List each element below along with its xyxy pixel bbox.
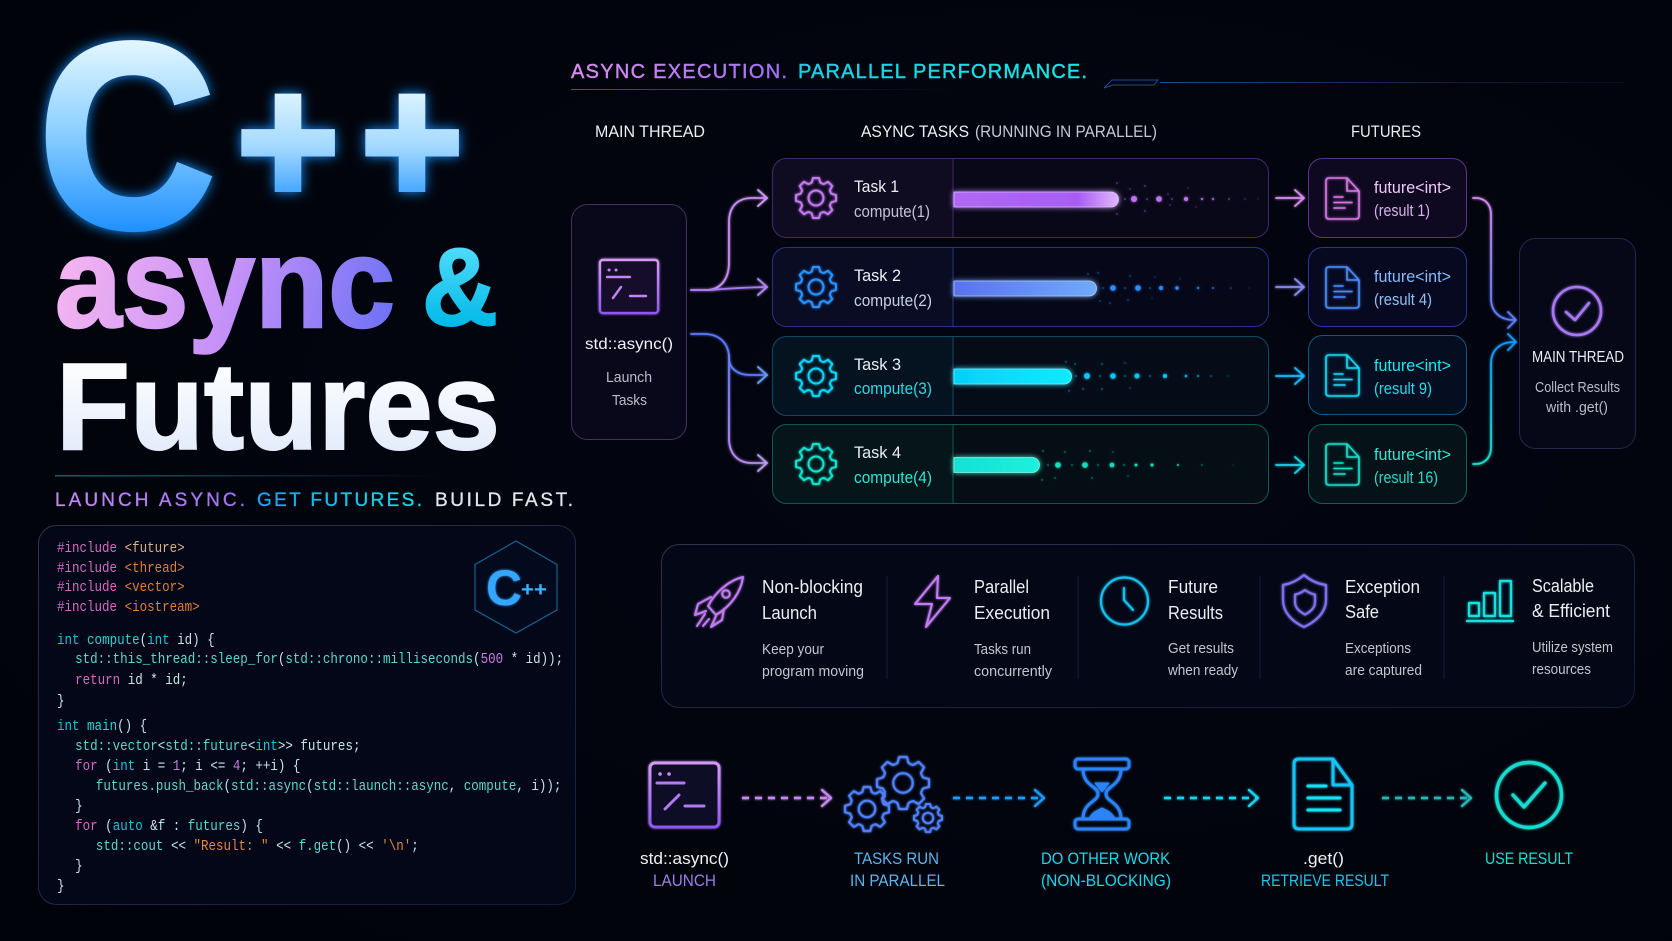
benefit: scalable (1467, 576, 1613, 678)
code listing: } (75, 799, 83, 815)
future 4 (1308, 424, 1466, 504)
code listing: std::vector<std::future<int>> futures; (75, 739, 360, 755)
title: C++ (38, 0, 462, 283)
panel: main thread collect: Collect Results (1535, 380, 1620, 396)
flow step: launch (640, 763, 729, 890)
benefit: non-blocking: Keep your (762, 641, 824, 658)
flow step: tasks run (845, 757, 945, 890)
benefit: exception safe: Exceptions (1345, 640, 1411, 657)
future 1: future<int> (1374, 179, 1451, 197)
benefit: exception safe: Safe (1345, 602, 1379, 622)
icon: document (1326, 178, 1359, 219)
future 3: future<int> (1374, 357, 1451, 375)
progress bar (954, 369, 1072, 384)
panel: main thread launch (572, 204, 686, 440)
code listing: } (57, 879, 65, 895)
particle trail (1087, 272, 1250, 304)
code listing: int main() { (57, 719, 147, 735)
column headers (595, 123, 1421, 141)
code listing: #include <iostream> (57, 600, 200, 616)
icon: gear (796, 178, 836, 218)
column headers: FUTURES (1351, 123, 1421, 141)
task row 4: compute(4) (854, 469, 932, 487)
flow step: get: .get() (1303, 849, 1344, 868)
arrows: tasks to futures (1276, 190, 1304, 473)
code listing: futures.push_back(std::async(std::launch::async, compute, i)); (96, 779, 561, 795)
future 4: (result 16) (1374, 469, 1438, 487)
progress bar (954, 281, 1097, 296)
code listing: int compute(int id) { (57, 633, 215, 649)
benefit: future results: when ready (1167, 662, 1238, 679)
benefit: scalable: Scalable (1532, 576, 1594, 596)
benefit: parallel: Tasks run (974, 641, 1031, 658)
task row 3: compute(3) (854, 380, 932, 398)
icon: bar chart (1467, 581, 1513, 621)
future 3: (result 9) (1374, 380, 1432, 398)
benefit: exception safe: are captured (1345, 662, 1422, 679)
particle trail (1116, 182, 1259, 215)
future 2 (1308, 248, 1466, 326)
code listing: std::cout << "Result: " << f.get() << '\n'; (96, 839, 419, 855)
panel: benefits (662, 544, 1634, 708)
icon: gears (845, 757, 942, 832)
future 4: future<int> (1374, 446, 1451, 464)
tagline: GET FUTURES. (257, 490, 422, 511)
flow step: use result: USE RESULT (1485, 850, 1573, 868)
heading: async execution: PARALLEL PERFORMANCE. (798, 61, 1087, 83)
panel: main thread launch: std::async() (585, 336, 673, 353)
icon: gear (796, 267, 836, 307)
icon: rocket (695, 577, 743, 627)
code listing: std::this_thread::sleep_for(std::chrono::milliseconds(500 * id)); (75, 652, 563, 668)
panel: code (38, 526, 576, 904)
flow step: launch: LAUNCH (653, 872, 716, 890)
progress bar (954, 192, 1119, 207)
code listing: } (57, 694, 65, 710)
icon: check (1553, 287, 1601, 335)
benefit: scalable: & Efficient (1532, 601, 1610, 621)
panel: main thread launch: Tasks (612, 392, 647, 409)
flow step: do other work: DO OTHER WORK (1041, 850, 1170, 868)
benefit: exception safe: Exception (1345, 577, 1420, 597)
flow step: use result (1485, 762, 1573, 868)
title: async: async (55, 212, 395, 355)
benefit: parallel: Parallel (974, 577, 1029, 597)
flow step: get (1261, 759, 1389, 890)
icon: check (1496, 762, 1562, 828)
tagline: LAUNCH ASYNC. (55, 490, 245, 511)
task row 1: Task 1 (854, 177, 899, 196)
title: C++: + (362, 41, 462, 240)
code listing: #include <thread> (57, 561, 185, 577)
C++ hexagon badge: ++ (521, 579, 547, 601)
panel: main thread collect (1520, 238, 1636, 448)
benefit: future results: Future (1168, 577, 1218, 597)
code listing: for (auto &f : futures) { (75, 819, 263, 835)
benefit: scalable: resources (1532, 661, 1591, 678)
arrows: launch to tasks (691, 190, 767, 471)
dashed arrow 2 (953, 790, 1044, 806)
icon: document (1326, 267, 1359, 308)
C++ hexagon badge (475, 541, 557, 633)
icon: document (1326, 355, 1359, 396)
icon: terminal (600, 260, 658, 313)
code listing (57, 541, 563, 895)
task row 1 (772, 158, 1268, 238)
benefit: parallel (915, 576, 1052, 680)
arrows: futures to main thread (1473, 198, 1516, 464)
dashed arrow 4 (1382, 790, 1471, 806)
icon: document (1326, 444, 1359, 485)
panel: main thread collect: MAIN THREAD (1532, 349, 1624, 366)
benefit: future results: Results (1168, 603, 1223, 623)
future 2: future<int> (1374, 268, 1451, 286)
icon: document (1294, 759, 1352, 829)
heading: async execution: ASYNC EXECUTION. (571, 61, 787, 83)
column headers: ASYNC TASKS (861, 123, 969, 141)
dashed arrow 1 (742, 790, 831, 806)
tagline: BUILD FAST. (435, 490, 573, 511)
panel: main thread collect: with .get() (1545, 400, 1608, 416)
future 3 (1308, 336, 1466, 414)
flow step: tasks run: IN PARALLEL (850, 872, 945, 890)
future 2: (result 4) (1374, 291, 1432, 309)
task row 2: compute(2) (854, 292, 932, 310)
flow step: launch: std::async() (640, 849, 729, 868)
icon: terminal (650, 763, 719, 827)
benefit: parallel: Execution (974, 603, 1050, 623)
icon: hourglass (1075, 759, 1129, 829)
column headers: MAIN THREAD (595, 123, 705, 141)
title: Futures: Futures (56, 339, 500, 476)
benefit: non-blocking (695, 577, 864, 680)
column headers: (RUNNING IN PARALLEL) (975, 123, 1157, 141)
task row 1: compute(1) (854, 203, 930, 221)
panel: main thread launch: Launch (606, 369, 652, 386)
task row 4 (772, 424, 1268, 504)
benefit: non-blocking: program moving (762, 663, 864, 680)
heading: async execution (571, 61, 1087, 83)
icon: bolt (915, 576, 950, 627)
icon: clock (1101, 578, 1148, 624)
progress bar (954, 458, 1040, 472)
code listing: } (75, 859, 83, 875)
task row 2 (772, 248, 1268, 326)
task row 2: Task 2 (854, 266, 901, 285)
flow step: tasks run: TASKS RUN (854, 850, 939, 868)
benefit: scalable: Utilize system (1532, 639, 1613, 656)
code listing: for (int i = 1; i <= 4; ++i) { (75, 759, 300, 775)
flow step: do other work: (NON-BLOCKING) (1041, 872, 1171, 890)
icon: shield (1283, 575, 1326, 627)
benefit: exception safe (1283, 575, 1422, 679)
code listing: #include <vector> (57, 580, 185, 596)
benefit: future results: Get results (1168, 640, 1234, 657)
particle trail (1041, 450, 1234, 481)
C++ hexagon badge: C (486, 560, 522, 616)
icon: gear (796, 356, 836, 396)
future 1: (result 1) (1374, 202, 1430, 220)
tagline (55, 490, 573, 511)
benefit: future results (1101, 577, 1238, 679)
benefit: non-blocking: Launch (762, 603, 817, 623)
particle trail (1065, 361, 1229, 392)
benefit: parallel: concurrently (974, 663, 1052, 680)
task row 3 (772, 336, 1268, 416)
code listing: return id * id; (75, 673, 188, 689)
dashed arrow 3 (1164, 790, 1258, 806)
flow step: do other work (1041, 759, 1171, 890)
flow step: get: RETRIEVE RESULT (1261, 872, 1389, 890)
benefit: non-blocking: Non-blocking (762, 577, 863, 597)
code listing: #include <future> (57, 541, 185, 557)
icon: gear (796, 444, 836, 484)
task row 4: Task 4 (854, 443, 901, 462)
future 1 (1308, 158, 1466, 238)
title: ampersand: & (422, 226, 498, 349)
title: C++: + (238, 41, 338, 240)
task row 3: Task 3 (854, 355, 901, 374)
